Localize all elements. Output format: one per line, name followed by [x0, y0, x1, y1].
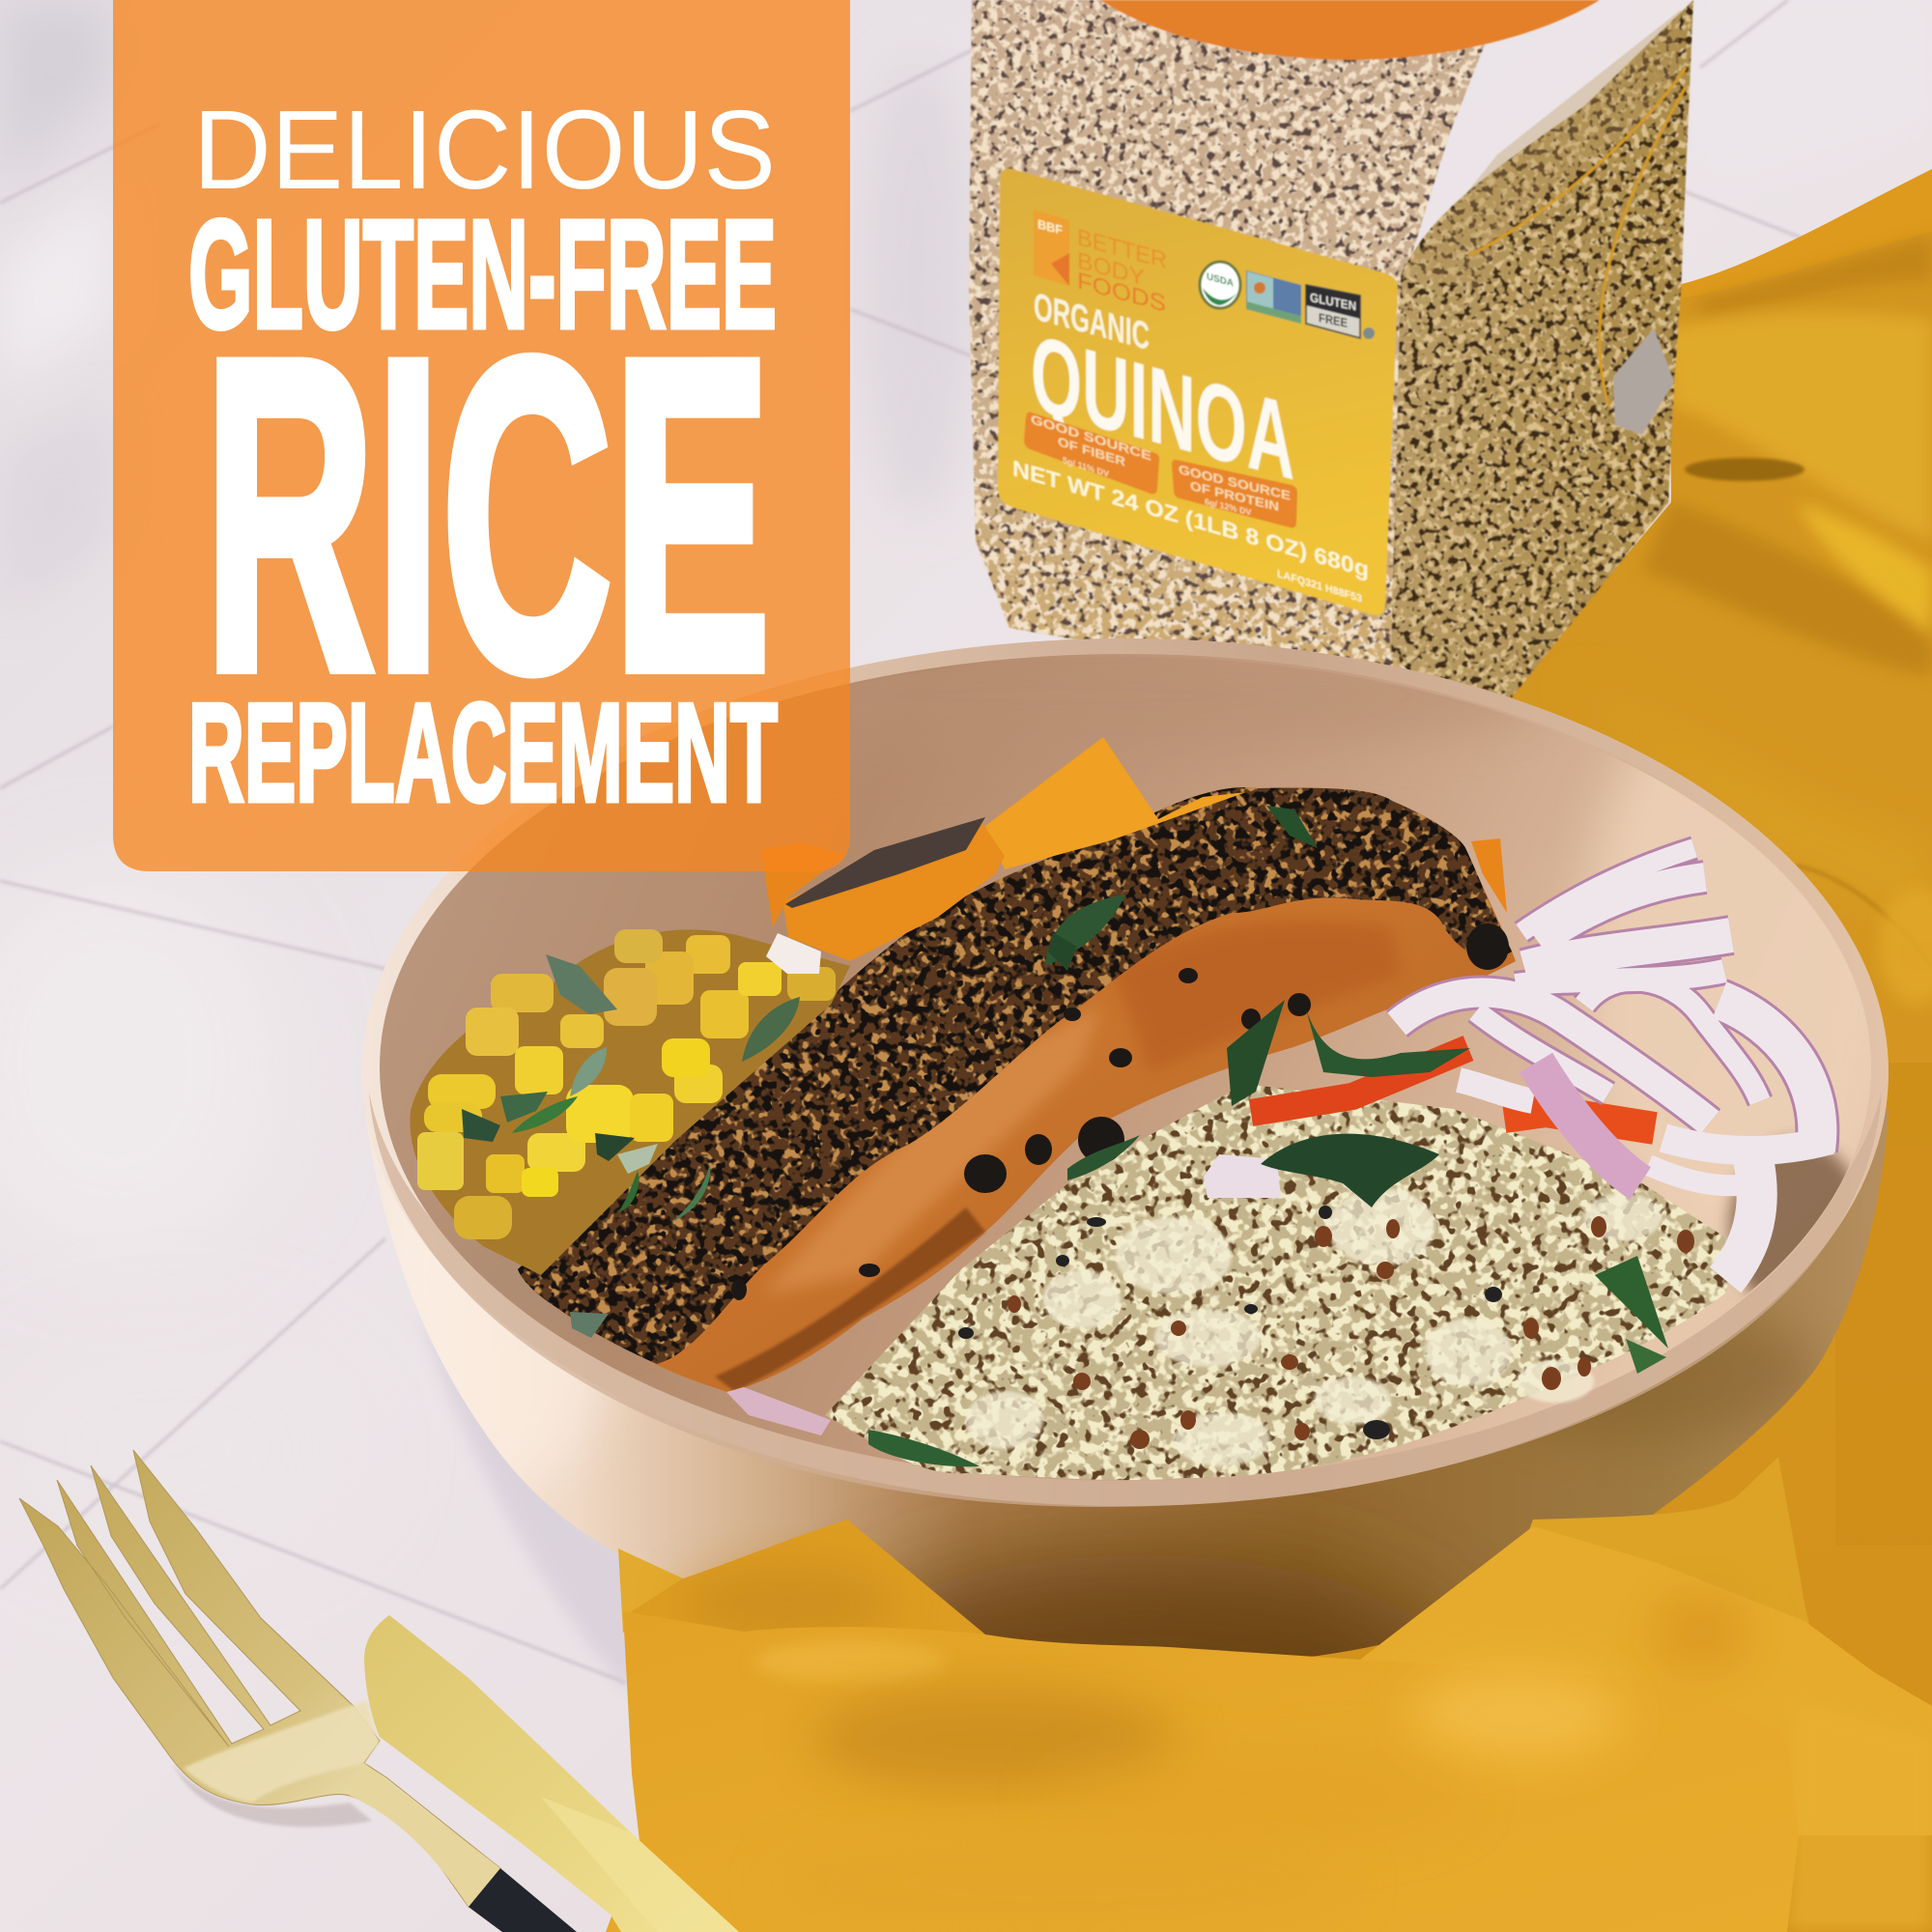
- squash piece behind panel: [761, 842, 845, 927]
- fiber line three: 5g/ 11% DV: [1063, 455, 1110, 479]
- bowl interior: [380, 654, 1871, 1481]
- squash piece behind salmon: [1471, 838, 1507, 913]
- flap shadow: [681, 1565, 894, 1642]
- main napkin fold: [606, 1611, 1799, 1932]
- BODY: BODY: [1077, 247, 1145, 292]
- protein text: GOOD SOURCE: [1179, 462, 1291, 503]
- brand ribbon: [1034, 210, 1069, 286]
- badge: protein: [1172, 460, 1297, 527]
- headline: rice: RICE: [204, 268, 771, 763]
- BBF mark: BBF: [1037, 216, 1063, 238]
- right edge fold: [1787, 1700, 1932, 1932]
- squash lower piece: [782, 819, 1005, 961]
- quinoa mound: [825, 1084, 1739, 1480]
- bowl wall shading: [386, 1053, 1816, 1806]
- jar right face: [1391, 0, 1693, 710]
- onion dice: [766, 933, 821, 974]
- food: [410, 737, 1831, 1480]
- onion dice on quinoa: [1204, 1154, 1281, 1198]
- blade highlight: [541, 1797, 739, 1932]
- gluten word: GLUTEN: [1310, 290, 1356, 314]
- knife blade: [364, 1615, 739, 1932]
- red pepper strips: [1251, 1048, 1655, 1128]
- quinoa herbs: [868, 1000, 1668, 1466]
- salmon fillet: [518, 787, 1516, 1392]
- bowl rim lower band: [369, 1092, 1882, 1507]
- brand ribbon arrow: [1051, 253, 1069, 286]
- fork: [19, 1450, 577, 1932]
- left small flap: [618, 1548, 683, 1633]
- salmon herbs: [1045, 806, 1318, 971]
- non-GMO footer: [1246, 301, 1301, 324]
- onion edge strokes: [1397, 848, 1817, 1150]
- seal green band: [1203, 288, 1237, 305]
- BETTER: BETTER: [1077, 224, 1167, 274]
- free word: FREE: [1319, 310, 1348, 330]
- napkin folds and light: [1565, 169, 1932, 1546]
- headline: delicious: DELICIOUS: [193, 87, 776, 213]
- squash charred skin: [785, 817, 985, 908]
- jar front face: [969, 0, 1502, 705]
- headline panel: [113, 0, 850, 871]
- back napkin: [1159, 169, 1932, 1932]
- seal lettering: USDA: [1207, 271, 1235, 290]
- gluten free badge: [1306, 285, 1360, 338]
- non-GMO left panel: [1247, 271, 1273, 316]
- bowl shadow on marble: [415, 1304, 676, 1690]
- onion bottom left: [726, 1387, 831, 1435]
- right peak flap: [1360, 1526, 1932, 1835]
- quinoa red seeds: [1008, 1216, 1694, 1449]
- protein line three: 6g/ 12% DV: [1205, 497, 1252, 518]
- brand name: [1077, 224, 1167, 318]
- rear right flap: [1449, 1457, 1835, 1739]
- USDA organic seal: [1200, 262, 1240, 308]
- corn base: [410, 929, 850, 1275]
- fork black handle tip: [469, 1868, 577, 1932]
- headline: gluten-free: GLUTEN-FREE: [188, 187, 777, 360]
- fork head and handle: [19, 1450, 500, 1907]
- bowl outer wall: [361, 1072, 1889, 1667]
- purple onion strip: [1536, 1063, 1640, 1183]
- jar handle notch: [1613, 328, 1674, 435]
- onion white strokes: [1397, 848, 1831, 1280]
- quinoa jar: [969, 0, 1693, 710]
- panel background: [113, 0, 850, 871]
- bowl rim: [362, 639, 1889, 1506]
- salmon dark seeds: [731, 923, 1509, 1300]
- label sticker: [998, 169, 1398, 615]
- jar lid: [1100, 0, 1600, 60]
- headline: replacement: REPLACEMENT: [188, 674, 778, 831]
- butterfly: [1254, 282, 1265, 294]
- product label: [998, 169, 1398, 615]
- badge: fiber: [1024, 412, 1159, 494]
- corn herb leaves: [462, 954, 800, 1338]
- right flap warm fold: [1652, 1594, 1748, 1671]
- quinoa bright clusters: [966, 1188, 1662, 1466]
- corn kernels: [417, 929, 836, 1239]
- quinoa black seeds: [958, 1206, 1502, 1439]
- non-GMO badge: [1246, 270, 1301, 324]
- left peak flap: [628, 1520, 1005, 1700]
- onion slices: [1397, 848, 1831, 1280]
- jar strings: [1468, 68, 1686, 406]
- salmon seed crust: [518, 787, 1512, 1364]
- corn: [410, 929, 850, 1338]
- fork palm highlight: [184, 1700, 379, 1803]
- fiber text: GOOD SOURCE: [1031, 412, 1151, 464]
- squash upper piece: [985, 737, 1246, 869]
- fork shadow edge: [172, 1763, 372, 1827]
- front napkin: [606, 1457, 1932, 1932]
- quinoa word: QUINOA: [1031, 312, 1294, 503]
- protein line two: OF PROTEIN: [1190, 478, 1279, 514]
- kosher mark: [1363, 327, 1375, 339]
- jar shoulder highlight: [1401, 10, 1681, 290]
- net weight: NET WT 24 OZ (1LB 8 OZ) 680g: [1012, 455, 1369, 582]
- gluten black header: [1306, 285, 1360, 319]
- napkin light and shadow: [753, 1640, 1623, 1932]
- salmon glazed highlights: [715, 920, 1401, 1391]
- lot code: LAFQ321 H88F53: [1277, 568, 1362, 605]
- interior shading: [425, 638, 1893, 1343]
- knife: [364, 1615, 739, 1932]
- bowl: [361, 639, 1889, 1657]
- fork handle: [350, 1763, 500, 1907]
- fiber line two: OF FIBER: [1058, 434, 1125, 469]
- FOODS: FOODS: [1077, 268, 1166, 318]
- organic word: ORGANIC: [1034, 284, 1150, 358]
